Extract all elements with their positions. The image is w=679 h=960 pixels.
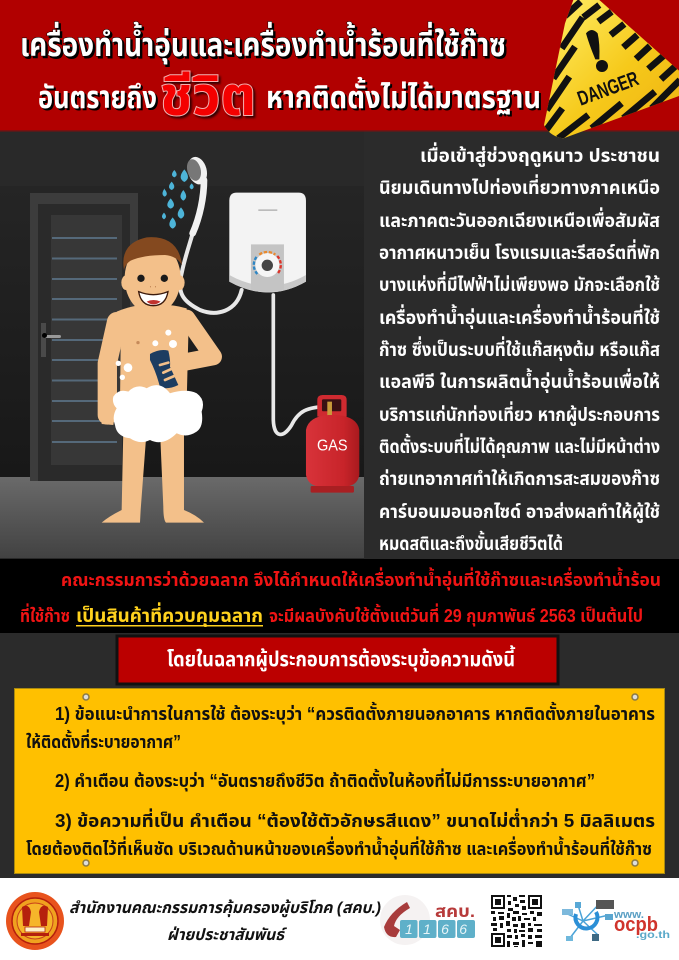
wall (0, 186, 364, 477)
text block: introduction: คาร์บอนมอนอกไซด์ อาจส่งผลทำให้ผู้ใช้ (379, 501, 660, 523)
panel: title banner (0, 0, 679, 130)
panel: committee announcement: ที่ใช้ก๊าซ (20, 603, 70, 626)
door (30, 193, 138, 481)
title line 2 left: อันตรายถึง (38, 80, 157, 115)
panel: label requirements list: 3) ข้อความที่เป็น คำเตือน “ต้องใช้ตัวอักษรสีแดง” ขนาดไม่ต่ำกว่า 5 มิลลิเมตร (55, 808, 655, 831)
panel: committee announcement (0, 559, 679, 633)
panel: committee announcement: คณะกรรมการว่าด้วยฉลาก จึงได้กำหนดให้เครื่องทำน้ำอุ่นที่ใช้ก๊าซและเครื่องทำน้ำร้อน (61, 567, 661, 591)
icon: OCPB seal (6, 892, 64, 950)
panel: illustration scene (0, 130, 679, 560)
panel: footer (0, 878, 679, 960)
bubbles (113, 330, 203, 442)
icon: gas cylinder (306, 395, 359, 493)
website logo (562, 900, 670, 941)
title emphasis word: ชีวิต (160, 67, 256, 127)
panel: label requirement heading (117, 636, 558, 684)
QR code (491, 895, 542, 947)
panel: label requirements list (14, 688, 664, 874)
icon: danger sign: DANGER (574, 67, 642, 111)
panel: label requirement heading: โดยในฉลากผู้ประกอบการต้องระบุข้อความดังนี้ (167, 645, 516, 671)
title line 1: เครื่องทำน้ำอุ่นและเครื่องทำน้ำร้อนที่ใช้ก๊าซ (20, 21, 506, 65)
website logo: www. (613, 909, 644, 921)
highlighted phrase: เป็นสินค้าที่ควบคุมฉลาก (76, 602, 263, 627)
character: man showering (102, 237, 213, 523)
hotline 1166 (380, 895, 475, 945)
panel: label requirements list: 1) ข้อแนะนำการในการใช้ ต้องระบุว่า “ควรติดตั้งภายนอกอาคาร หากติดตั้งภายในอาคาร (55, 702, 655, 725)
panel: label requirements list: ให้ติดตั้งที่ระบายอากาศ” (26, 729, 181, 752)
text block: introduction: นิยมเดินทางไปท่องเที่ยวทางภาคเหนือ (379, 174, 660, 199)
sponge (150, 350, 178, 388)
icon: water heater (229, 193, 306, 292)
icon: danger sign (544, 0, 679, 138)
icon: gas cylinder: GAS (317, 438, 348, 455)
panel: label requirements list: 2) คำเตือน ต้องระบุว่า “อันตรายถึงชีวิต ถ้าติดตั้งในห้องที่ไม่มีการระบายอากาศ” (55, 768, 595, 792)
text block: introduction: แอลพีจี ในการผลิตน้ำอุ่นน้ำร้อนเพื่อให้ (379, 368, 660, 393)
title line 2 right: หากติดตั้งไม่ได้มาตรฐาน (266, 76, 541, 115)
text block: introduction: เมื่อเข้าสู่ช่วงฤดูหนาว ประชาชน (420, 142, 660, 167)
text block: introduction: หมดสติและถึงขั้นเสียชีวิตได้ (379, 531, 563, 555)
icon: shower head and water drops (162, 155, 210, 229)
floor (0, 477, 364, 558)
text block: introduction: และภาคตะวันออกเฉียงเหนือเพื่อสัมผัส (379, 207, 660, 232)
panel: footer: ฝ่ายประชาสัมพันธ์ (167, 926, 287, 944)
text block: introduction: เครื่องทำน้ำอุ่นและเครื่องทำน้ำร้อนที่ใช้ (379, 304, 660, 329)
office name: สำนักงานคณะกรรมการคุ้มครองผู้บริโภค (สคบ.) (69, 899, 381, 918)
panel: committee announcement: จะมีผลบังคับใช้ตั้งแต่วันที่ 29 กุมภาพันธ์ 2563 เป็นต้นไป (269, 603, 643, 627)
text block: introduction (379, 142, 660, 555)
text block: introduction: ถ่ายเทอากาศทำให้เกิดการสะสมของก๊าซ (379, 468, 660, 490)
water heater pipes (180, 180, 328, 434)
hotline 1166: สคบ. (435, 902, 475, 921)
website logo: .go.th (636, 930, 670, 941)
hotline 1166: 1 1 6 6 (405, 921, 467, 937)
website logo: ocpb (614, 914, 658, 936)
screws (83, 694, 638, 866)
